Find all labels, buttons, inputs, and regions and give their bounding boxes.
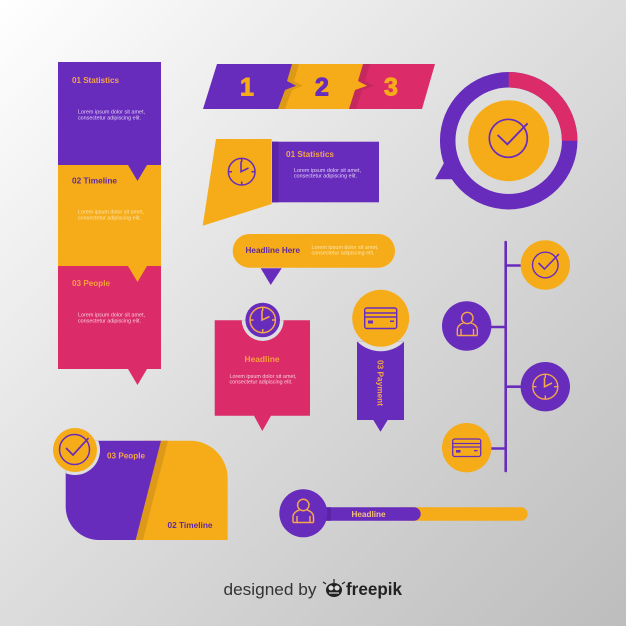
panel: vertical timeline with icons xyxy=(442,240,570,472)
panel: headline pill: Headline Here xyxy=(246,245,300,255)
icon: person xyxy=(293,499,314,522)
step 01 statistics: consectetur adipiscing elit. xyxy=(78,116,141,122)
panel: rounded two-tone card with check badge: 02 Timeline xyxy=(168,520,213,530)
panel: clock statistics card: consectetur adipiscing elit. xyxy=(294,173,357,179)
panel: payment ribbon xyxy=(352,290,410,432)
step 02 timeline xyxy=(58,165,161,282)
panel: pink headline card with clock badge: consectetur adipiscing elit. xyxy=(230,379,293,385)
panel: donut speech bubble with check xyxy=(435,72,577,202)
footer: designed by freepik xyxy=(224,579,402,599)
step 03 people: Lorem ipsum dolor sit amet, xyxy=(78,312,145,318)
panel: numbered banner 1 2 3 xyxy=(203,64,435,109)
node: person xyxy=(442,301,491,351)
panel: headline pill: Lorem ipsum dolor sit amet, xyxy=(312,245,379,251)
step 01 statistics: 01 Statistics xyxy=(72,75,119,85)
number 1: 1 xyxy=(240,74,254,102)
panel: headline progress bar xyxy=(279,489,528,537)
footer: designed by freepik: freepik xyxy=(346,579,402,599)
node: check xyxy=(521,240,570,290)
panel: vertical three-step column xyxy=(58,62,161,385)
number 2: 2 xyxy=(315,74,329,102)
panel: rounded two-tone card with check badge xyxy=(50,425,228,540)
panel: pink headline card with clock badge: Lorem ipsum dolor sit amet, xyxy=(230,374,297,380)
node: credit card xyxy=(442,423,491,472)
step 03 people: 03 People xyxy=(72,278,110,288)
icon: check circle xyxy=(60,434,90,464)
number 3: 3 xyxy=(384,74,398,102)
panel: headline pill xyxy=(233,234,395,285)
step 02 timeline: Lorem ipsum dolor sit amet, xyxy=(78,210,144,216)
panel: clock statistics card: Lorem ipsum dolor sit amet, xyxy=(294,168,361,174)
icon: clock xyxy=(250,307,276,333)
icon: credit card xyxy=(365,308,397,328)
step 02 timeline: consectetur adipiscing elit. xyxy=(78,216,141,222)
step 01 statistics xyxy=(58,62,161,181)
step 01 statistics: Lorem ipsum dolor sit amet, xyxy=(78,110,145,116)
icon: clock xyxy=(228,158,255,185)
node: clock xyxy=(521,362,570,411)
icon: freepik mascot xyxy=(323,579,345,597)
panel: clock statistics card: 01 Statistics xyxy=(286,149,334,159)
panel: pink headline card with clock badge xyxy=(215,299,310,431)
panel: headline progress bar: Headline xyxy=(352,509,386,519)
panel: clock statistics card xyxy=(203,139,379,226)
step 03 people xyxy=(58,266,161,385)
footer: designed by freepik: designed by xyxy=(224,580,317,599)
panel: headline pill: consectetur adipiscing elit. xyxy=(312,251,375,257)
step 03 people: consectetur adipiscing elit. xyxy=(78,318,141,324)
step 02 timeline: 02 Timeline xyxy=(72,176,117,186)
panel: payment ribbon: 03 Payment xyxy=(376,360,386,406)
panel: pink headline card with clock badge: Headline xyxy=(244,354,280,364)
icon: check circle xyxy=(489,119,528,157)
panel: rounded two-tone card with check badge: 03 People xyxy=(107,450,145,460)
